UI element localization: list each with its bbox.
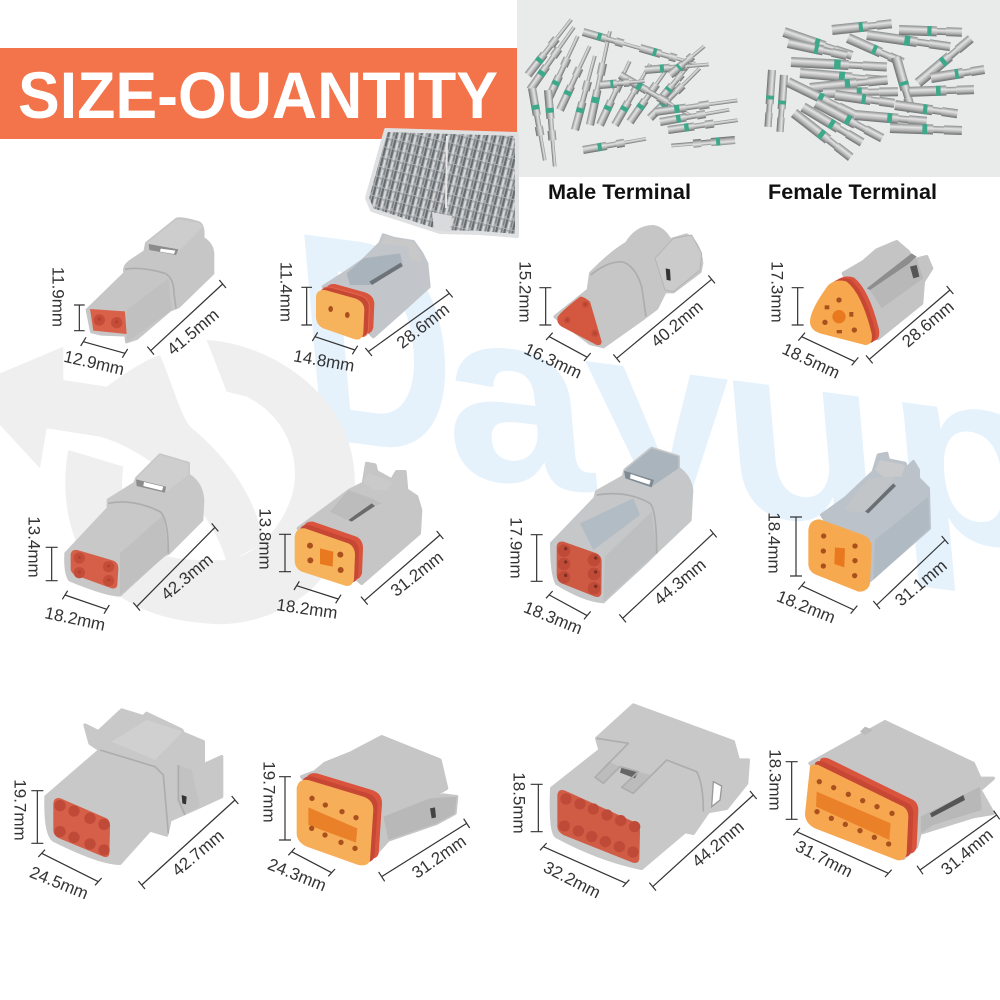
- watermark: Dayup wordmark: [284, 169, 1000, 608]
- male 3-pin connector with dimensions: [539, 227, 715, 362]
- panel: connector 6: [256, 463, 447, 623]
- female 3-pin connector with dimensions: [792, 242, 953, 365]
- dimension: height: 18.4mm: [764, 512, 784, 574]
- dimension: width: 18.3mm: [521, 598, 585, 638]
- dimension: length: 41.5mm: [163, 305, 223, 359]
- female 8-pin connector with dimensions: [279, 737, 470, 881]
- dimension: width: 32.2mm: [540, 858, 604, 902]
- box of terminals: [367, 130, 517, 236]
- label: female terminal: Female Terminal: [768, 181, 937, 204]
- panel: terminals photo: [517, 0, 1000, 177]
- dimension: height: 19.7mm: [260, 761, 278, 823]
- female terminals: [764, 19, 985, 161]
- female 6-pin connector with dimensions: [790, 453, 948, 614]
- title banner: [0, 48, 517, 139]
- female 12-pin connector with dimensions: [786, 722, 1000, 877]
- dimension: length: 31.2mm: [387, 548, 447, 600]
- dimension: length: 40.2mm: [647, 297, 707, 351]
- dimension: width: 24.5mm: [27, 863, 91, 903]
- panel: connector 10: [260, 737, 470, 895]
- panel: connector 7: [506, 448, 717, 638]
- terminal labels: [548, 181, 937, 204]
- dimension: length: 31.2mm: [408, 832, 470, 882]
- dimension: height: 11.4mm: [276, 262, 296, 322]
- dimension: height: 17.9mm: [506, 517, 526, 579]
- male 12-pin connector with dimensions: [531, 705, 757, 891]
- female 4-pin connector with dimensions: [279, 463, 443, 605]
- dimension: width: 18.2mm: [275, 595, 339, 623]
- watermark letter D: D: [284, 169, 468, 521]
- panel: connector 3: [516, 227, 715, 383]
- dimension: length: 28.6mm: [393, 300, 453, 352]
- dimension: width: 24.3mm: [265, 855, 329, 895]
- watermark: grey arrow logo: [0, 340, 355, 624]
- female 2-pin connector with dimensions: [301, 235, 453, 356]
- dimension: height: 11.9mm: [48, 267, 68, 327]
- box divider: [446, 136, 447, 208]
- dimension: height: 18.3mm: [766, 749, 784, 811]
- dimension: width: 18.2mm: [43, 603, 107, 635]
- photo background: [517, 0, 1000, 177]
- box contents: [367, 130, 517, 236]
- dimension: length: 31.1mm: [891, 556, 951, 610]
- title text: SIZE-OUANTITY: [18, 58, 498, 132]
- dimension: width: 16.3mm: [521, 339, 585, 383]
- dimension: length: 31.4mm: [937, 825, 997, 879]
- dimension: width: 12.9mm: [62, 347, 126, 379]
- dimension: length: 44.2mm: [688, 817, 748, 871]
- label: male terminal: Male Terminal: [548, 181, 691, 204]
- logo crescent: [65, 340, 355, 624]
- dimension: length: 42.7mm: [168, 826, 228, 880]
- male 4-pin connector with dimensions: [46, 455, 218, 614]
- banner background: [0, 48, 517, 139]
- dimension: width: 14.8mm: [292, 346, 356, 376]
- male 2-pin connector with dimensions: [74, 219, 226, 358]
- dimension: length: 28.6mm: [898, 297, 958, 351]
- panel: connector 12: [766, 722, 1000, 881]
- male terminals: [525, 17, 738, 167]
- male 8-pin connector with dimensions: [31, 710, 238, 889]
- dimension: width: 31.7mm: [792, 837, 856, 881]
- panel: connector 9: [10, 710, 238, 903]
- dimension: height: 18.5mm: [510, 772, 528, 834]
- panel: connector 11: [510, 705, 757, 902]
- dimension: height: 13.8mm: [256, 508, 274, 570]
- panel: connector 1: [48, 219, 226, 379]
- panel: connector 4: [768, 242, 958, 383]
- logo arrow band: [0, 347, 263, 563]
- panel: connector 2: [276, 235, 453, 376]
- panel: connector 8: [764, 453, 951, 627]
- dimension: height: 15.2mm: [516, 261, 534, 323]
- dimension: width: 18.2mm: [774, 587, 838, 627]
- dimension: height: 13.4mm: [24, 516, 44, 578]
- dimension: height: 17.3mm: [768, 261, 786, 323]
- male 6-pin connector with dimensions: [531, 448, 717, 622]
- dimension: length: 42.3mm: [157, 550, 217, 604]
- dimension: length: 44.3mm: [650, 555, 710, 609]
- dimension: height: 19.7mm: [10, 779, 30, 841]
- dimension: width: 18.5mm: [779, 339, 843, 383]
- panel: connector 5: [24, 455, 218, 635]
- box latch: [432, 212, 452, 232]
